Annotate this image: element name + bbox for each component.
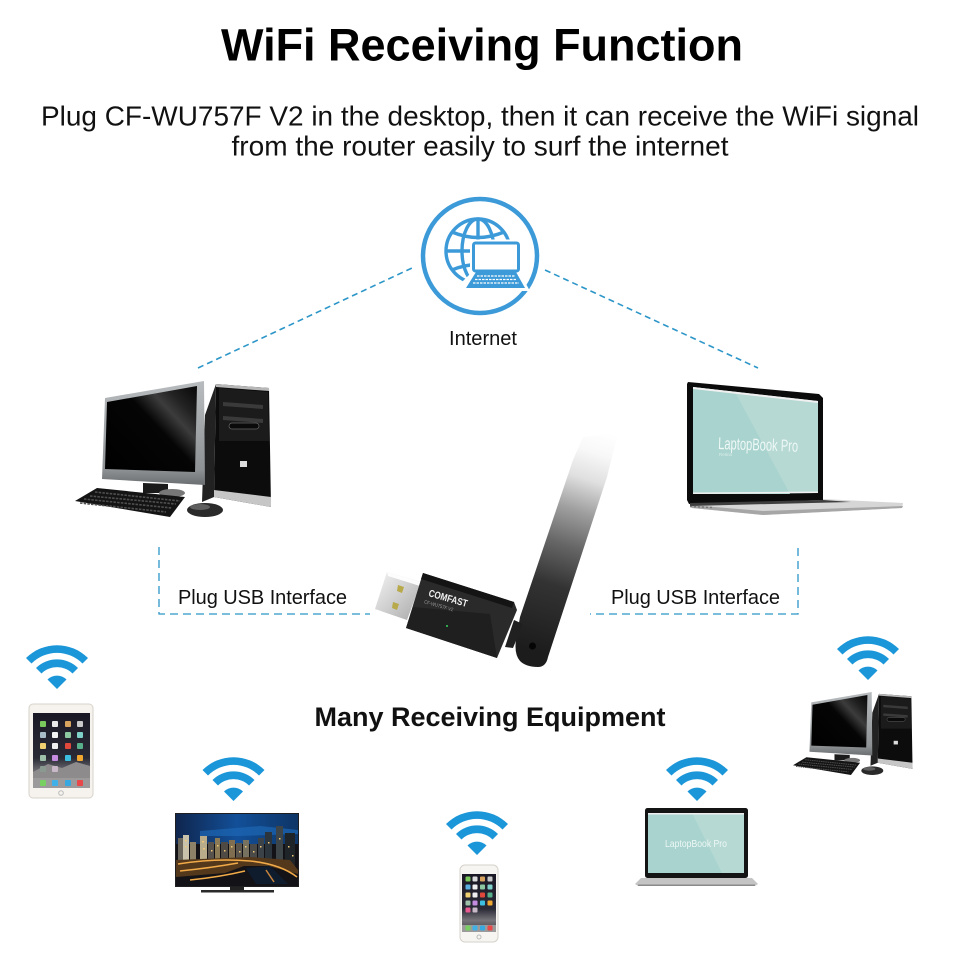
small laptop screen text: LaptopBook Pro bbox=[665, 838, 727, 850]
label: plug USB interface right: Plug USB Interface bbox=[611, 587, 780, 609]
subtitle text block: from the router easily to surf the internet bbox=[232, 131, 729, 162]
connector: laptop USB line bbox=[590, 548, 798, 614]
title: WiFi Receiving Function bbox=[221, 20, 743, 70]
USB WiFi adapter with antenna bbox=[375, 433, 618, 667]
small laptop bbox=[635, 808, 758, 886]
icon: wifi above small laptop bbox=[666, 757, 728, 801]
icon: internet globe and laptop bbox=[423, 199, 537, 313]
subtitle text block: Plug CF-WU757F V2 in the desktop, then it can receive the WiFi signal bbox=[41, 101, 919, 132]
brand text on adapter: CF-WU757F V2 bbox=[423, 599, 454, 613]
laptop screen text: Retina bbox=[719, 452, 733, 457]
brand text on adapter bbox=[423, 588, 469, 617]
icon: wifi above tablet bbox=[26, 645, 88, 689]
smartphone bbox=[460, 865, 498, 942]
icon: wifi above small desktop bbox=[837, 636, 899, 680]
laptop screen text bbox=[718, 434, 798, 457]
television bbox=[175, 813, 299, 892]
connector: desktop USB line bbox=[159, 547, 370, 614]
dashed link: internet to desktop bbox=[198, 268, 412, 368]
icon: wifi above TV bbox=[202, 757, 264, 801]
heading: many receiving equipment: Many Receiving Equipment bbox=[314, 702, 666, 732]
tablet device bbox=[29, 704, 93, 798]
small desktop computer bbox=[793, 692, 913, 775]
laptop computer bbox=[687, 382, 903, 515]
subtitle text block bbox=[41, 101, 919, 162]
brand text on adapter: COMFAST bbox=[427, 588, 469, 610]
desktop computer bbox=[75, 381, 271, 517]
laptop screen text: LaptopBook Pro bbox=[718, 434, 798, 456]
icon: wifi above phone bbox=[446, 811, 508, 855]
label: Internet: Internet bbox=[449, 328, 517, 350]
dashed link: internet to laptop bbox=[545, 270, 758, 368]
label: plug USB interface left: Plug USB Interface bbox=[178, 587, 347, 609]
